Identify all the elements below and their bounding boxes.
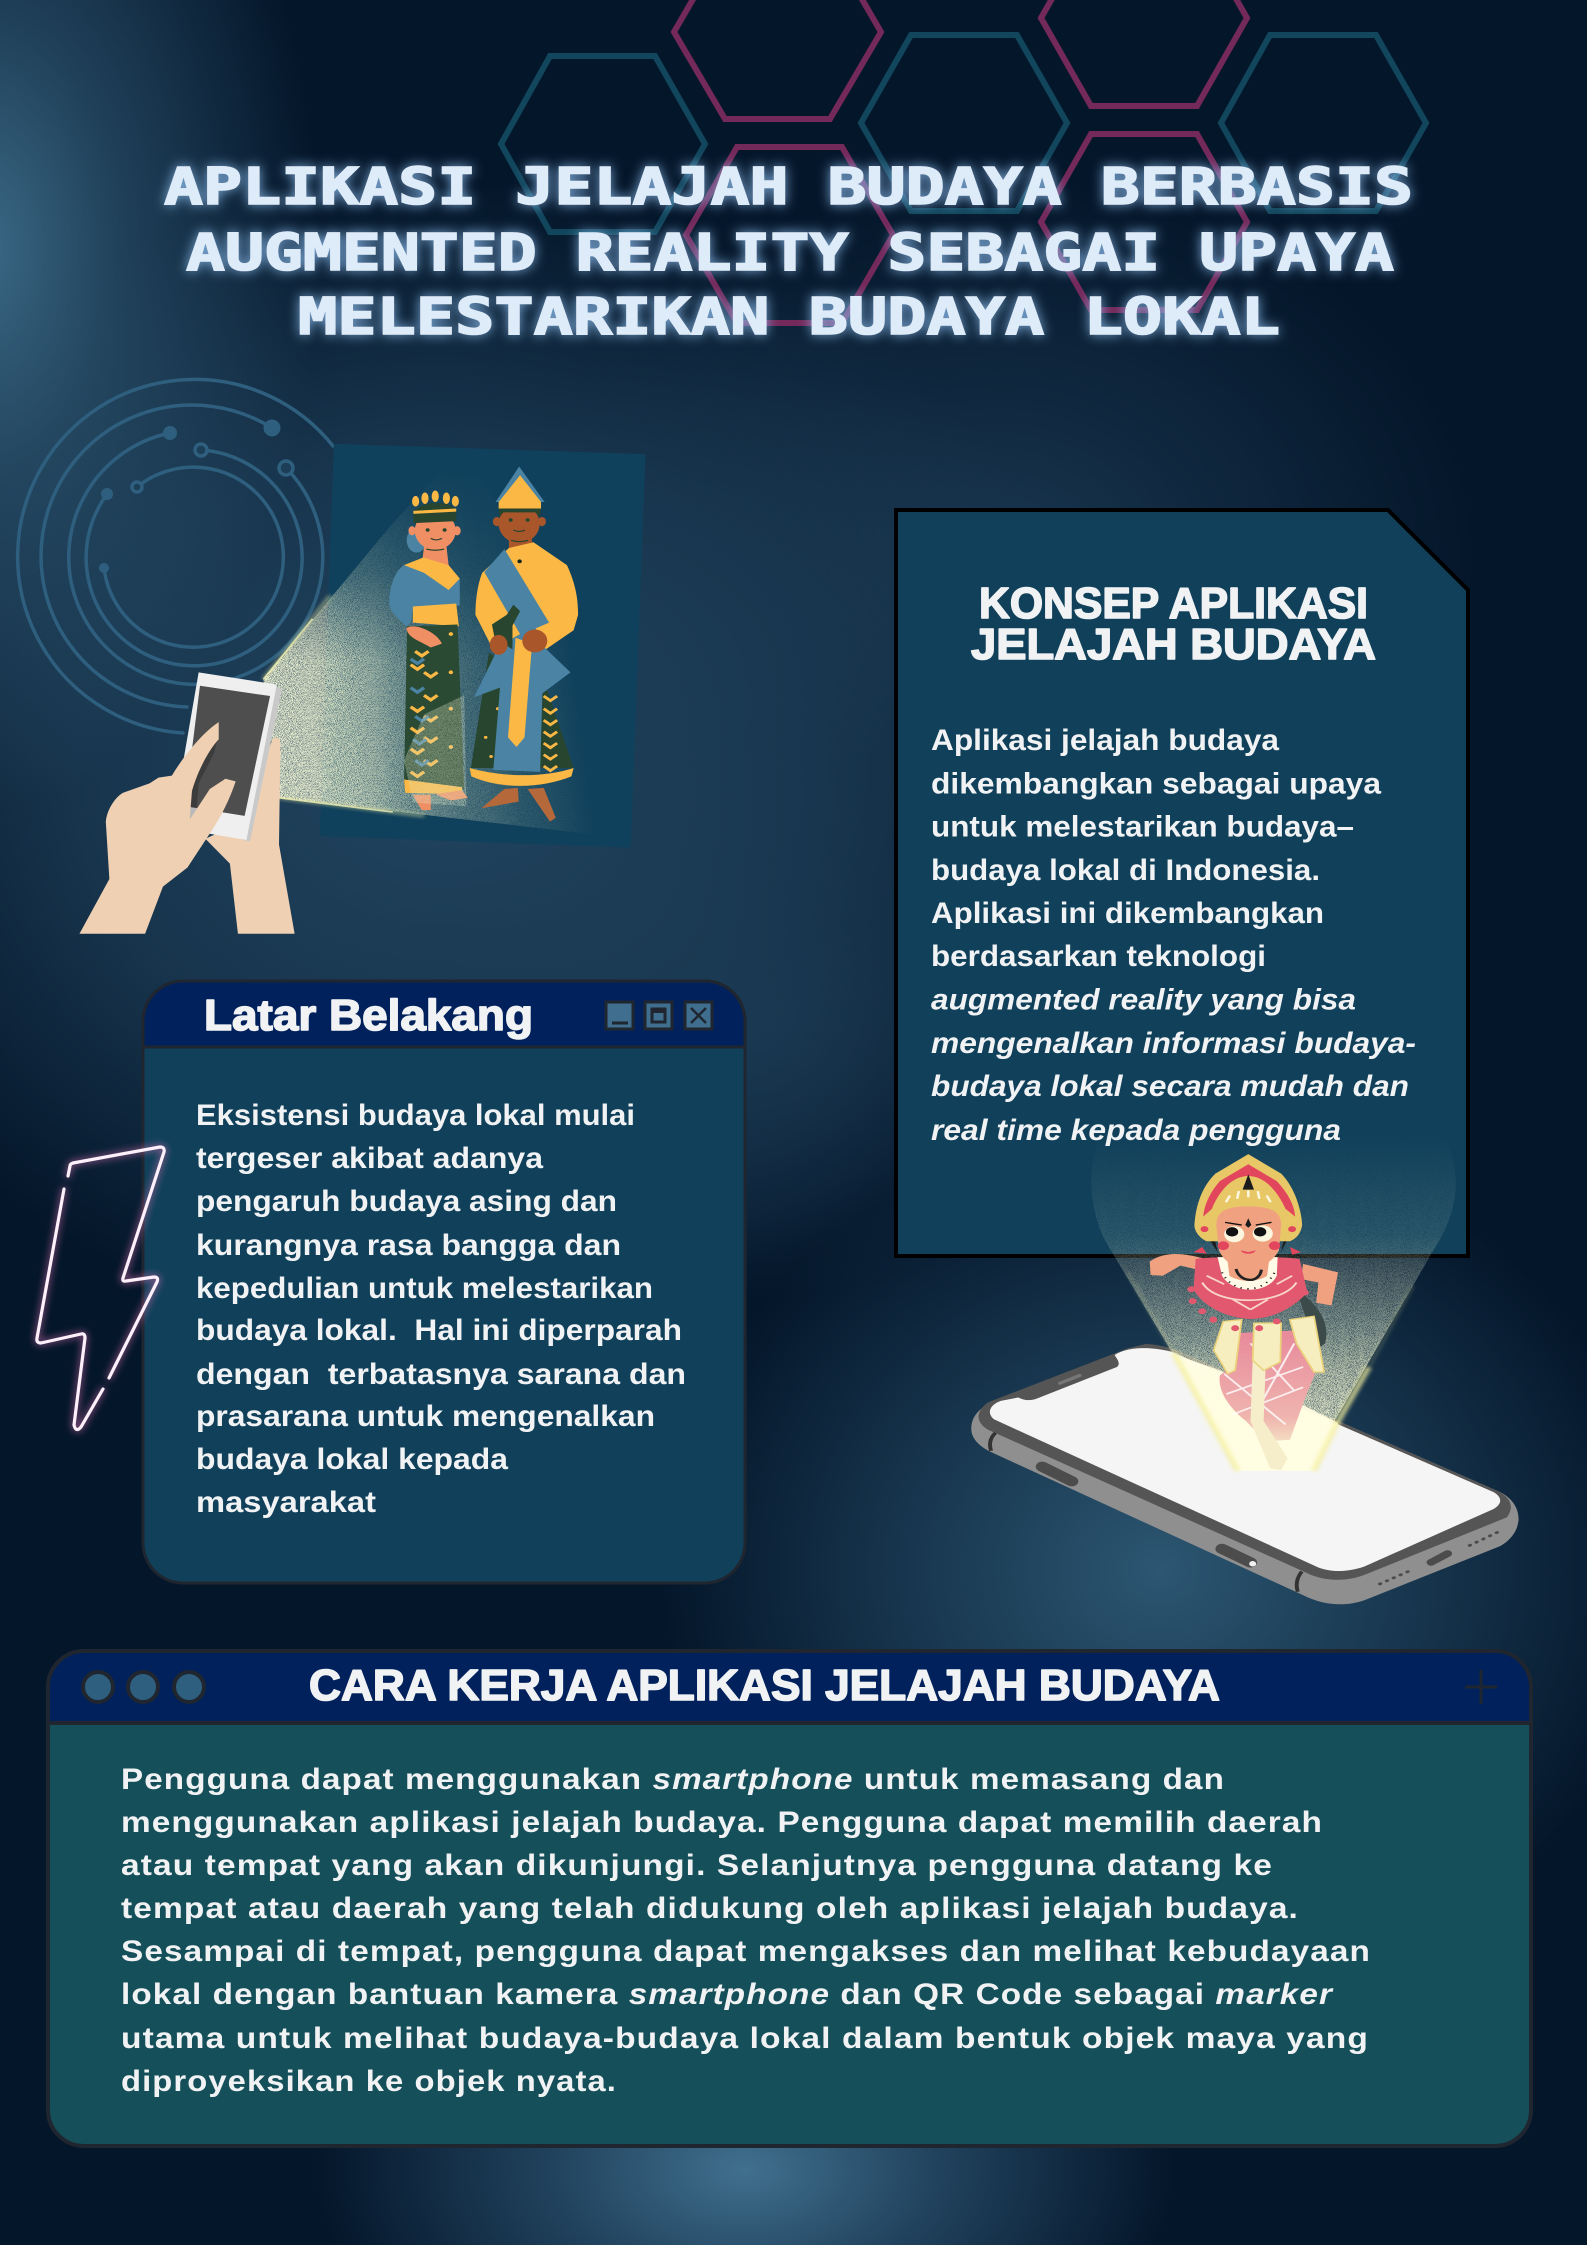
- text block: konsep description: dikembangkan sebagai upaya: [931, 768, 1381, 800]
- window control buttons: [606, 1002, 712, 1029]
- light haze over woman's skirt: [404, 695, 466, 806]
- light beam from phone: [260, 496, 580, 832]
- text block: cara kerja description: tempat atau daerah yang telah didukung oleh aplikasi jelajah budaya.: [121, 1892, 1299, 1925]
- panel: latar belakang: [143, 981, 745, 1583]
- text block: konsep description: Aplikasi jelajah budaya: [931, 724, 1279, 757]
- decorative hexagons: [501, 0, 1426, 323]
- dancer figure: [1150, 1154, 1338, 1470]
- text block: konsep description: budaya lokal di Indonesia.: [931, 854, 1320, 887]
- back hand: [205, 738, 295, 934]
- header bar: [143, 981, 745, 1047]
- marker panel behind the couple: [320, 444, 645, 848]
- text block: latar belakang description: Eksistensi budaya lokal mulai: [196, 1099, 635, 1132]
- text block: konsep description: berdasarkan teknologi: [931, 940, 1266, 973]
- title: APLIKASI JELAJAH BUDAYA BERBASIS: [164, 158, 1413, 217]
- text block: latar belakang description: dengan terbatasnya sarana dan: [196, 1358, 686, 1391]
- text block: konsep description: augmented reality yang bisa: [931, 984, 1356, 1016]
- large smartphone: [971, 1344, 1519, 1604]
- hologram light beam: [1091, 1134, 1456, 1471]
- text block: konsep description: budaya lokal secara mudah dan: [931, 1070, 1409, 1103]
- text block: latar belakang description: prasarana untuk mengenalkan: [196, 1400, 655, 1433]
- text block: latar belakang description: pengaruh budaya asing dan: [196, 1185, 617, 1218]
- header bar: [48, 1651, 1531, 1723]
- small phone: [172, 672, 282, 841]
- text block: konsep description: Aplikasi ini dikembangkan: [931, 897, 1324, 930]
- title: [164, 158, 1413, 347]
- icon: neon lightning bolt: [37, 1147, 164, 1430]
- icon: plus: [1465, 1670, 1497, 1704]
- text block: cara kerja description: [121, 1763, 1371, 2098]
- panel: cara kerja aplikasi: [48, 1651, 1531, 2146]
- traditional man figure: [470, 466, 578, 822]
- pointing hand: [79, 722, 236, 934]
- text block: latar belakang description: kurangnya rasa bangga dan: [196, 1229, 621, 1262]
- window dots: [83, 1672, 204, 1702]
- text block: cara kerja description: Sesampai di tempat, pengguna dapat mengakses dan melihat kebudayaan: [121, 1935, 1371, 1968]
- circuit circles decoration: [18, 379, 333, 733]
- heading: konsep aplikasi jelajah budaya: [971, 579, 1376, 669]
- title: MELESTARIKAN BUDAYA LOKAL: [298, 288, 1280, 347]
- text block: latar belakang description: kepedulian untuk melestarikan: [196, 1272, 653, 1305]
- heading: konsep aplikasi jelajah budaya: KONSEP APLIKASI: [979, 579, 1368, 628]
- text block: latar belakang description: budaya lokal kepada: [196, 1443, 508, 1476]
- illustration: hand with phone projecting traditional couple: [79, 444, 645, 934]
- text block: latar belakang description: [196, 1099, 686, 1519]
- heading: latar belakang: Latar Belakang: [204, 991, 533, 1040]
- text block: konsep description: [931, 724, 1416, 1147]
- heading: konsep aplikasi jelajah budaya: JELAJAH BUDAYA: [971, 620, 1376, 669]
- text block: cara kerja description: diproyeksikan ke objek nyata.: [121, 2065, 617, 2098]
- text block: cara kerja description: atau tempat yang akan dikunjungi. Selanjutnya pengguna datang ke: [121, 1849, 1273, 1882]
- traditional woman figure: [389, 491, 468, 810]
- heading: cara kerja: CARA KERJA APLIKASI JELAJAH BUDAYA: [309, 1661, 1220, 1710]
- text block: cara kerja description: menggunakan aplikasi jelajah budaya. Pengguna dapat memilih daerah: [121, 1806, 1323, 1839]
- panel: konsep aplikasi: [896, 510, 1468, 1256]
- text block: latar belakang description: budaya lokal. Hal ini diperparah: [196, 1314, 682, 1347]
- text block: cara kerja description: Pengguna dapat menggunakan smartphone untuk memasang dan: [121, 1763, 1225, 1796]
- text block: cara kerja description: lokal dengan bantuan kamera smartphone dan QR Code sebagai marker: [121, 1978, 1334, 2011]
- text block: konsep description: mengenalkan informasi budaya-: [931, 1027, 1416, 1060]
- text block: cara kerja description: utama untuk melihat budaya-budaya lokal dalam bentuk objek maya yang: [121, 2022, 1369, 2055]
- text block: latar belakang description: tergeser akibat adanya: [196, 1142, 543, 1175]
- text block: konsep description: untuk melestarikan budaya–: [931, 810, 1354, 844]
- text block: konsep description: real time kepada pengguna: [931, 1114, 1341, 1147]
- title: AUGMENTED REALITY SEBAGAI UPAYA: [186, 224, 1394, 283]
- illustration: phone with AR dancer hologram: [971, 1134, 1519, 1604]
- text block: latar belakang description: masyarakat: [196, 1486, 376, 1519]
